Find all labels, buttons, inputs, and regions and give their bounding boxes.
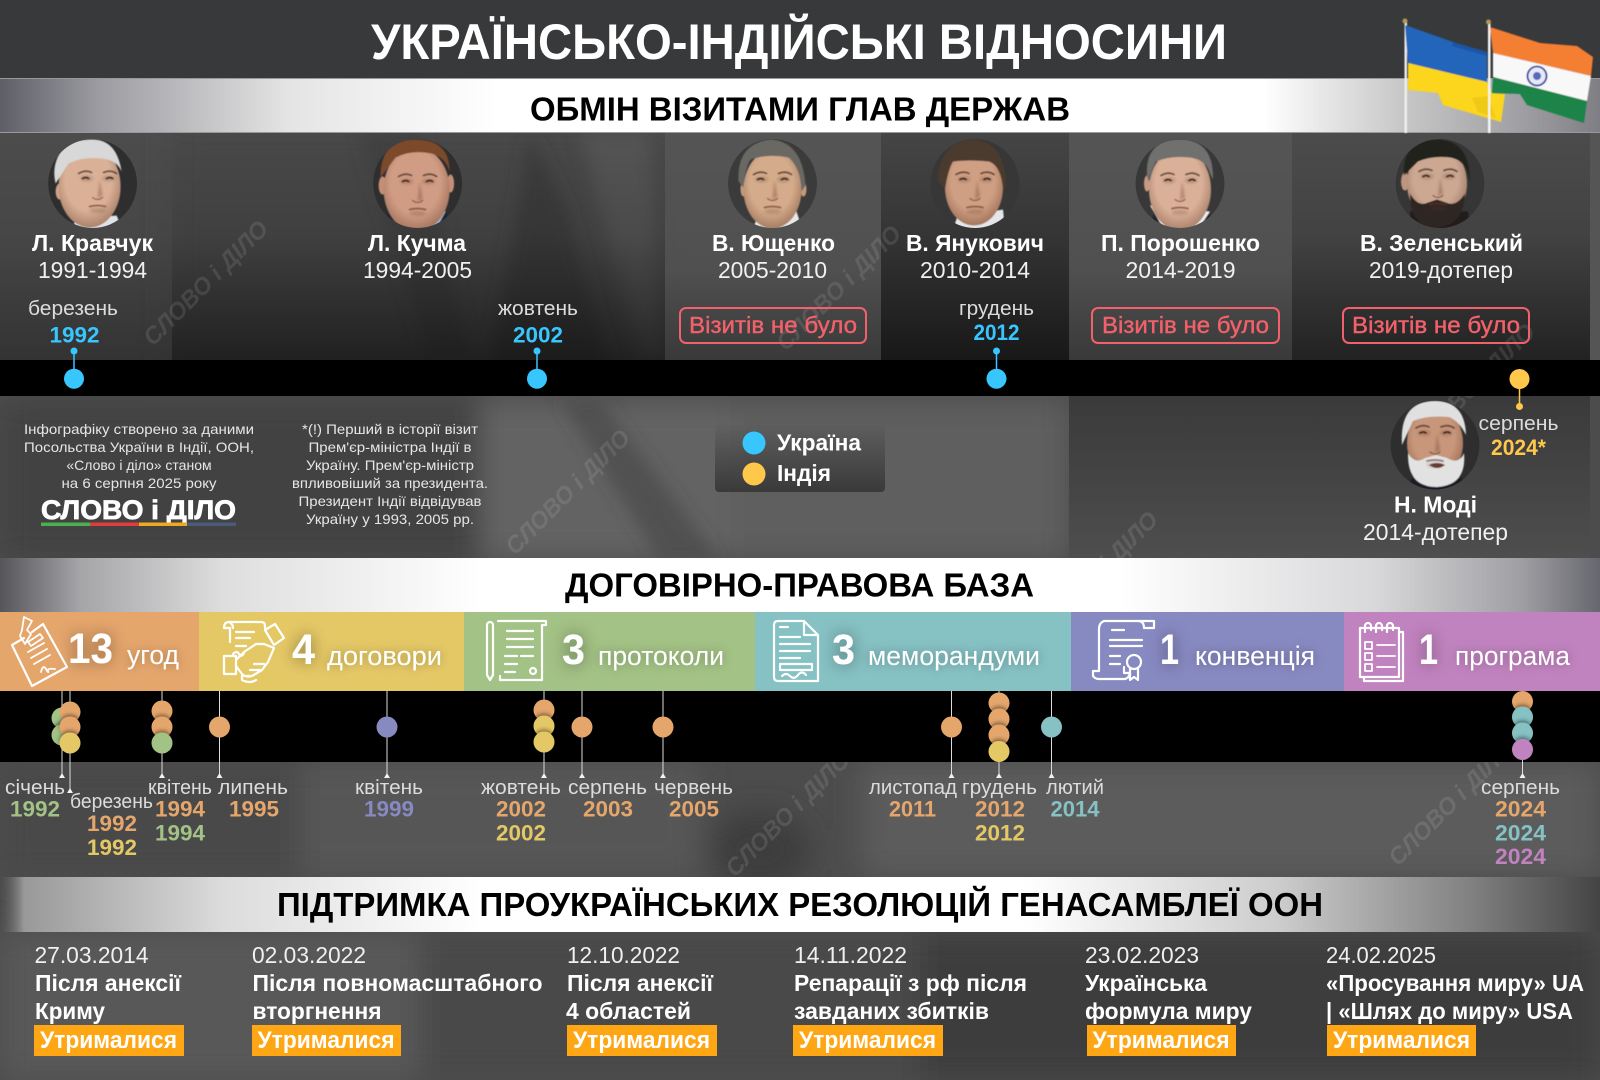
visit dates above timeline: 2012 xyxy=(974,320,1020,345)
portrait: Yanukovych xyxy=(930,139,1020,230)
visit dates above timeline: грудень xyxy=(959,298,1034,320)
timeline labels: 2002 xyxy=(496,820,546,846)
timeline 2 xyxy=(0,691,1600,793)
title: УКРАЇНСЬКО-ІНДІЙСЬКІ ВІДНОСИНИ xyxy=(371,13,1227,70)
title bar xyxy=(0,0,1600,78)
resolution 4: завданих збитків xyxy=(794,998,989,1024)
logo: СЛОВО і ДІЛО xyxy=(41,495,236,525)
timeline labels: 2003 xyxy=(583,796,633,822)
timeline labels: 2012 xyxy=(975,820,1025,846)
timeline labels: 1999 xyxy=(364,796,414,822)
chip: Утрималися xyxy=(1333,1027,1470,1054)
resolution 1 xyxy=(34,942,184,1056)
president labels: В. Зеленський xyxy=(1360,230,1523,256)
resolution 6 xyxy=(1326,942,1584,1056)
heading: visits: ОБМІН ВІЗИТАМИ ГЛАВ ДЕРЖАВ xyxy=(530,90,1070,128)
watermarks xyxy=(85,215,1541,882)
column panels xyxy=(0,132,1600,558)
resolution 3: 4 областей xyxy=(566,998,691,1024)
resolution 2: 02.03.2022 xyxy=(252,942,366,968)
timeline labels: 1994 xyxy=(155,796,206,822)
timeline labels: 2014 xyxy=(1050,796,1100,822)
president labels: 1991-1994 xyxy=(38,257,147,283)
section band: treaties xyxy=(0,558,1600,612)
legend xyxy=(715,424,885,492)
timeline 1 xyxy=(0,348,1600,410)
timeline labels: листопад xyxy=(869,777,957,799)
president labels: В. Ющенко xyxy=(712,230,835,256)
footnote: впливовіший за президента. xyxy=(292,475,488,491)
category: programme xyxy=(1344,612,1600,691)
category: convention xyxy=(1071,612,1344,691)
sources note xyxy=(24,421,254,491)
sources note: «Слово і діло» станом xyxy=(66,457,212,473)
footnote xyxy=(292,421,488,527)
section band: UN xyxy=(0,877,1600,932)
timeline labels: 2012 xyxy=(975,796,1025,822)
president labels: 2010-2014 xyxy=(920,257,1030,283)
timeline labels: червень xyxy=(654,777,733,799)
timeline labels: січень xyxy=(5,777,65,799)
India visit marker xyxy=(1510,369,1530,410)
visit dates above timeline: березень xyxy=(28,298,118,320)
Modi labels: серпень xyxy=(1478,413,1558,435)
president labels: 2014-2019 xyxy=(1126,257,1236,283)
timeline stems xyxy=(62,691,1522,790)
timeline labels xyxy=(5,777,1560,869)
president labels: П. Порошенко xyxy=(1101,230,1260,256)
watermarks: СЛОВО і ДІЛО xyxy=(85,582,221,718)
portrait: Poroshenko xyxy=(1136,139,1224,230)
visit dates above timeline xyxy=(28,298,1034,348)
timeline labels: 2002 xyxy=(496,796,546,822)
category: memoranda: 3 xyxy=(832,626,855,674)
chip: Утрималися xyxy=(258,1027,394,1054)
chip: Утрималися xyxy=(573,1027,710,1054)
president labels: Л. Кравчук xyxy=(32,230,153,256)
resolution 6: «Просування миру» UA xyxy=(1326,970,1584,996)
flag of Ukraine xyxy=(1402,18,1505,133)
watermarks: СЛОВО і ДІЛО xyxy=(720,746,856,882)
watermarks: СЛОВО і ДІЛО xyxy=(1028,506,1164,642)
portrait: Modi xyxy=(1390,400,1480,491)
category: programme: програма xyxy=(1455,641,1570,671)
portrait: Yushchenko xyxy=(728,139,817,230)
watermarks: СЛОВО і ДІЛО xyxy=(1383,735,1519,871)
timeline labels: жовтень xyxy=(481,777,561,799)
flag of India xyxy=(1486,20,1593,133)
flags xyxy=(1402,18,1593,133)
timeline labels: квітень xyxy=(148,777,212,799)
resolution 5: 23.02.2023 xyxy=(1085,942,1199,968)
resolution 5: формула миру xyxy=(1085,998,1252,1024)
resolution 5: Українська xyxy=(1085,970,1207,996)
legend: Індія xyxy=(777,460,831,486)
watermarks: СЛОВО і ДІЛО xyxy=(138,215,274,351)
heading: UN: ПІДТРИМКА ПРОУКРАЇНСЬКИХ РЕЗОЛЮЦІЙ ГЕНАСАМБЛЕЇ ООН xyxy=(277,885,1323,923)
visit dates above timeline: 1992 xyxy=(50,322,100,348)
president labels xyxy=(32,230,1523,283)
timeline labels: 2011 xyxy=(889,796,936,822)
Ukraine visit markers xyxy=(64,348,1006,389)
Modi labels xyxy=(1363,413,1558,545)
category: convention: конвенція xyxy=(1195,641,1315,671)
watermarks: СЛОВО і ДІЛО xyxy=(771,220,907,356)
president labels: 1994-2005 xyxy=(363,257,472,283)
resolution 6: 24.02.2025 xyxy=(1326,942,1436,968)
resolution 2 xyxy=(252,942,542,1056)
sources note: на 6 серпня 2025 року xyxy=(62,475,216,491)
category: memoranda xyxy=(755,612,1071,691)
Modi labels: 2014-дотепер xyxy=(1363,519,1508,545)
resolution 6: | «Шлях до миру» USA xyxy=(1326,998,1573,1024)
timeline labels: серпень xyxy=(568,777,647,799)
timeline labels: грудень xyxy=(962,777,1037,799)
visit dates above timeline: жовтень xyxy=(498,298,578,320)
resolution 4: Репарації з рф після xyxy=(794,970,1027,996)
timeline labels: 1992 xyxy=(87,835,137,860)
sources note: Посольства України в Індії, ООН, xyxy=(24,439,254,455)
category: agreements xyxy=(0,612,199,691)
no-visit badges: Візитів не було xyxy=(689,312,857,338)
president labels: Л. Кучма xyxy=(368,230,466,256)
timeline labels: березень xyxy=(70,791,153,813)
no-visit badges xyxy=(680,308,1529,343)
timeline labels: липень xyxy=(218,777,288,799)
category: protocols: 3 xyxy=(562,626,585,674)
category: treaties: договори xyxy=(327,641,442,671)
chip: Утрималися xyxy=(799,1027,936,1054)
timeline dots xyxy=(52,691,1533,762)
footnote: Україну. Прем'єр-міністр xyxy=(306,457,474,473)
resolution 2: Після повномасштабного xyxy=(252,970,542,996)
resolution 2: вторгнення xyxy=(252,998,382,1024)
legend: Україна xyxy=(777,430,861,456)
timeline labels: 2024 xyxy=(1495,796,1547,822)
timeline labels: 1994 xyxy=(155,820,206,846)
category: memoranda: меморандуми xyxy=(868,641,1040,671)
president labels: 2019-дотепер xyxy=(1369,257,1513,283)
category: convention: 1 xyxy=(1160,626,1179,674)
category: treaties xyxy=(199,612,464,691)
timeline labels: 2005 xyxy=(669,796,719,822)
timeline labels: лютий xyxy=(1046,777,1104,799)
timeline labels: 1992 xyxy=(87,811,137,836)
resolution 3 xyxy=(566,942,717,1056)
chip: Утрималися xyxy=(40,1027,177,1054)
timeline labels: 2024 xyxy=(1495,820,1547,846)
category: treaties: 4 xyxy=(292,626,315,674)
resolution 4: 14.11.2022 xyxy=(794,942,907,968)
portrait: Kravchuk xyxy=(48,139,137,230)
category: agreements: угод xyxy=(127,640,180,670)
resolution 1: Після анексії xyxy=(35,970,182,996)
resolution 1: Криму xyxy=(35,998,105,1024)
timeline labels: 1992 xyxy=(10,796,60,822)
timeline labels: квітень xyxy=(355,777,423,799)
section band: visits xyxy=(0,78,1600,133)
Modi labels: 2024* xyxy=(1491,435,1546,460)
timeline labels: 2024 xyxy=(1495,844,1547,869)
resolution 3: 12.10.2022 xyxy=(567,942,680,968)
president labels: 2005-2010 xyxy=(718,257,827,283)
category: protocols xyxy=(464,612,755,691)
footnote: *(!) Перший в історії візит xyxy=(302,421,479,437)
category: protocols: протоколи xyxy=(598,641,724,671)
category row xyxy=(0,612,1600,691)
Modi labels: Н. Моді xyxy=(1394,492,1477,518)
watermarks: СЛОВО і ДІЛО xyxy=(1405,318,1541,454)
resolution 1: 27.03.2014 xyxy=(34,942,149,968)
resolution 4 xyxy=(793,942,1027,1056)
timeline labels: серпень xyxy=(1481,777,1560,799)
category: agreements: 13 xyxy=(68,625,113,673)
timeline labels: 1995 xyxy=(229,796,279,822)
watermarks: СЛОВО і ДІЛО xyxy=(500,424,636,560)
timeline arrows xyxy=(59,773,1526,793)
footnote: Україну у 1993, 2005 рр. xyxy=(306,511,474,527)
visit dates above timeline: 2002 xyxy=(513,322,563,348)
no-visit badges: Візитів не було xyxy=(1352,312,1520,338)
portrait: Zelensky xyxy=(1396,139,1484,230)
footnote: Прем'єр-міністра Індії в xyxy=(308,439,472,455)
resolution 5 xyxy=(1085,942,1252,1056)
sources note: Інфографіку створено за даними xyxy=(24,421,254,437)
president labels: В. Янукович xyxy=(906,230,1044,256)
heading: treaties: ДОГОВІРНО-ПРАВОВА БАЗА xyxy=(565,566,1034,604)
footnote: Президент Індії відвідував xyxy=(298,493,482,509)
no-visit badges: Візитів не було xyxy=(1102,312,1269,338)
portrait: Kuchma xyxy=(373,139,462,232)
chip: Утрималися xyxy=(1092,1027,1230,1054)
resolution 3: Після анексії xyxy=(567,970,714,996)
category: programme: 1 xyxy=(1419,626,1438,674)
